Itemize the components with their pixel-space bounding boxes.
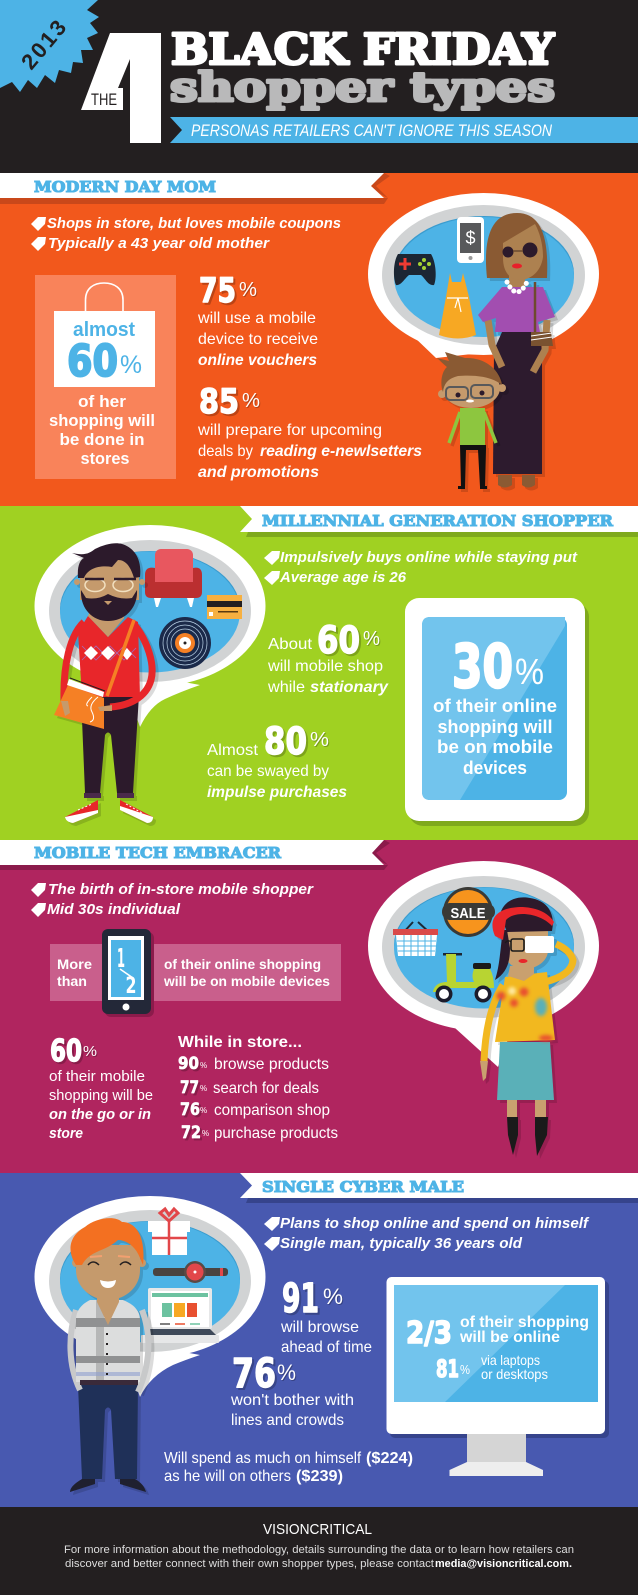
ribbon heading	[0, 840, 390, 870]
stat: 75 percent: %	[239, 279, 257, 301]
callout: almost 60 percent: shopping will	[49, 411, 155, 430]
subtitle ribbon: PERSONAS RETAILERS CAN'T IGNORE THIS SEASON	[191, 121, 553, 140]
stat: about 60 percent: while	[267, 679, 305, 696]
callout: more than one half: will be on mobile devices	[163, 973, 330, 989]
callout: almost 60 percent: stores	[80, 449, 130, 468]
subtitle ribbon	[170, 117, 638, 143]
stat: 91 percent	[280, 1276, 372, 1356]
stat: 85 percent: will prepare for upcoming	[197, 422, 382, 439]
bullets	[31, 881, 314, 918]
footer note: media@visioncritical.com.	[435, 1558, 572, 1570]
stat: almost 80 percent: Almost	[207, 742, 259, 759]
numeral 4 with THE	[81, 33, 161, 143]
stat: about 60 percent	[267, 619, 389, 696]
list: while in store: search for deals	[213, 1080, 319, 1097]
bullets	[264, 549, 578, 586]
icon: shopping basket	[393, 922, 438, 956]
title: shopper types	[170, 64, 555, 111]
stat: 85 percent: and promotions	[198, 464, 319, 481]
list: while in store: purchase products	[214, 1125, 338, 1142]
callout: more than one half: than	[57, 973, 87, 989]
character: bearded man	[54, 543, 153, 823]
stat: 75 percent: will use a mobile	[197, 310, 316, 327]
callout: tablet 30 percent: devices	[463, 758, 527, 778]
text: spending comparison: ($224)	[366, 1450, 413, 1467]
title: BLACK FRIDAY	[171, 25, 555, 74]
callout: desktop monitor: 81	[436, 1355, 459, 1383]
stat: 76 percent: won't bother with	[230, 1392, 354, 1409]
stat: 60 percent on the go: on the go or in	[49, 1106, 151, 1123]
callout: almost 60 percent	[35, 275, 176, 479]
ribbon heading	[240, 1173, 638, 1203]
callout: more than one half: of their online shopping	[164, 956, 321, 972]
speech bubble: mom wishlist	[368, 193, 599, 358]
icon: sale badge: SALE	[450, 905, 486, 922]
bullets: Mid 30s individual	[47, 901, 181, 918]
icon: laptop	[141, 1288, 219, 1343]
icon: armchair	[145, 549, 202, 607]
stat: 75 percent: device to receive	[198, 331, 318, 348]
callout: more than one half: 1	[117, 944, 125, 974]
stat: almost 80 percent: 80	[264, 720, 307, 763]
icon: phone	[457, 217, 484, 263]
stat: almost 80 percent	[207, 720, 347, 801]
bullets: The birth of in-store mobile shopper	[48, 881, 314, 898]
callout: tablet 30 percent: %	[515, 651, 544, 692]
stat: almost 80 percent: %	[310, 729, 329, 751]
speech bubble: millennial wishlist	[34, 525, 266, 727]
callout: tablet 30 percent: 30	[452, 632, 513, 702]
text: spending comparison: ($239)	[296, 1468, 343, 1485]
icon: gift	[148, 1209, 190, 1255]
stat: 60 percent on the go: of their mobile	[49, 1068, 145, 1085]
stat: 85 percent	[197, 382, 422, 481]
character: red haired man	[70, 1218, 148, 1492]
callout: more than one half: 2	[126, 974, 136, 999]
callout: tablet 30 percent	[405, 598, 589, 826]
callout: almost 60 percent: 60	[67, 336, 118, 387]
stat: about 60 percent: 60	[317, 619, 360, 662]
icon: scooter	[433, 953, 494, 1002]
icon: credit card	[207, 595, 242, 619]
bullets: Shops in store, but loves mobile coupons	[47, 215, 341, 232]
bullets: Typically a 43 year old mother	[48, 235, 270, 252]
stat: 75 percent	[197, 271, 318, 369]
callout: desktop monitor: 2/3	[406, 1316, 452, 1351]
stat: 75 percent: 75	[199, 271, 236, 311]
callout: tablet 30 percent: shopping will	[438, 717, 552, 737]
bullets	[31, 215, 341, 252]
panel: mobile tech embracer	[0, 840, 638, 1173]
callout: desktop monitor: via laptops	[481, 1352, 540, 1368]
callout: more than one half: More	[57, 956, 92, 972]
stat: about 60 percent: will mobile shop	[267, 658, 383, 675]
stat: almost 80 percent: can be swayed by	[207, 763, 329, 780]
icon: game controller	[394, 254, 436, 285]
stat: 60 percent on the go	[49, 1034, 153, 1142]
stat: 91 percent: ahead of time	[281, 1339, 372, 1356]
callout: more than one half	[50, 929, 341, 1017]
list: while in store: %	[202, 1129, 209, 1138]
numeral 4 with THE: THE	[91, 91, 117, 109]
icon: watch	[153, 1261, 228, 1283]
stat: 76 percent: %	[277, 1360, 296, 1385]
stat: 76 percent: 76	[232, 1351, 276, 1397]
stat: 60 percent on the go: shopping will be	[49, 1087, 153, 1104]
icon: sale badge	[442, 887, 495, 937]
callout: almost 60 percent: almost	[73, 319, 135, 341]
list: while in store: browse products	[214, 1056, 329, 1073]
stat: 85 percent: 85	[199, 382, 239, 422]
stat: 60 percent on the go: %	[83, 1043, 97, 1060]
footer	[0, 1507, 638, 1595]
stat: 76 percent: lines and crowds	[231, 1412, 344, 1429]
ribbon heading	[0, 173, 390, 204]
character: boy	[437, 352, 506, 489]
list: while in store: 77	[180, 1078, 199, 1098]
badge: 2013: 2013	[16, 15, 71, 74]
badge: 2013	[0, 0, 99, 92]
bullets: Single man, typically 36 years old	[280, 1235, 523, 1252]
callout: tablet 30 percent: be on mobile	[437, 737, 553, 757]
text: spending comparison: as he will on others	[164, 1468, 291, 1485]
list: while in store: 72	[181, 1123, 201, 1143]
icon: dress	[439, 273, 476, 338]
stat: about 60 percent: stationary	[310, 679, 389, 696]
stat: about 60 percent: About	[268, 636, 313, 653]
stat: 91 percent: 91	[282, 1276, 319, 1322]
callout: tablet 30 percent: of their online	[433, 696, 557, 716]
callout: desktop monitor	[386, 1277, 609, 1476]
panel: millennial generation shopper	[0, 506, 638, 840]
list: while in store: While in store...	[178, 1034, 302, 1051]
ribbon heading: MOBILE TECH EMBRACER	[34, 844, 282, 862]
callout: desktop monitor: will be online	[459, 1329, 560, 1346]
stat: 91 percent: will browse	[280, 1319, 359, 1336]
list: while in store	[178, 1034, 338, 1143]
icon: vinyl record	[159, 617, 211, 669]
footer note	[64, 1544, 574, 1570]
text: spending comparison: Will spend as much on himself	[164, 1450, 361, 1467]
speech bubble: male wishlist	[34, 1196, 266, 1397]
stat: 60 percent on the go: store	[49, 1125, 83, 1142]
title	[170, 25, 555, 111]
callout: almost 60 percent: be done in	[60, 430, 144, 449]
ribbon heading	[240, 506, 638, 537]
panel: modern day mom	[0, 173, 638, 506]
list: while in store: 90	[178, 1054, 199, 1074]
bullets	[264, 1215, 590, 1252]
stat: about 60 percent: %	[363, 628, 380, 650]
text: spending comparison	[164, 1450, 413, 1485]
speech bubble: mobile wishlist	[368, 861, 599, 1067]
stat: 60 percent on the go: 60	[50, 1034, 82, 1069]
ribbon heading: MILLENNIAL GENERATION SHOPPER	[262, 512, 614, 530]
stat: 76 percent	[230, 1351, 354, 1429]
stat: 85 percent: reading e-newlsetters	[260, 443, 422, 460]
bullets: Plans to shop online and spend on himself	[280, 1215, 590, 1232]
icon: phone: $	[465, 228, 476, 248]
callout: desktop monitor: or desktops	[481, 1366, 548, 1382]
bullets: Impulsively buys online while staying put	[280, 549, 578, 566]
logo: Vision Critical: VISIONCRITICAL	[263, 1521, 372, 1538]
callout: desktop monitor: of their shopping	[460, 1314, 589, 1331]
ribbon heading: MODERN DAY MOM	[34, 178, 216, 196]
footer note: For more information about the methodology, details surrounding the data or to learn how retailers can	[64, 1544, 574, 1556]
footer note: discover and better connect with their own shopper types, please contact	[65, 1558, 434, 1570]
list: while in store: %	[200, 1084, 207, 1093]
list: while in store: %	[200, 1106, 207, 1115]
stat: 85 percent: %	[242, 390, 260, 412]
stat: 85 percent: deals by	[198, 443, 253, 460]
ribbon heading: SINGLE CYBER MALE	[262, 1178, 464, 1196]
stat: almost 80 percent: impulse purchases	[207, 784, 347, 801]
callout: almost 60 percent: of her	[78, 392, 126, 411]
list: while in store: comparison shop	[214, 1102, 330, 1119]
stat: 75 percent: online vouchers	[198, 352, 317, 369]
header band	[0, 0, 638, 173]
character: mother	[478, 213, 555, 488]
list: while in store: %	[200, 1061, 207, 1070]
list: while in store: 76	[180, 1100, 200, 1120]
bullets: Average age is 26	[279, 569, 407, 586]
stat: 91 percent: %	[323, 1284, 343, 1309]
callout: desktop monitor: %	[460, 1362, 470, 1377]
panel: single cyber male	[0, 1173, 638, 1507]
character: woman with phone	[480, 897, 573, 1156]
callout: almost 60 percent: %	[120, 351, 142, 379]
